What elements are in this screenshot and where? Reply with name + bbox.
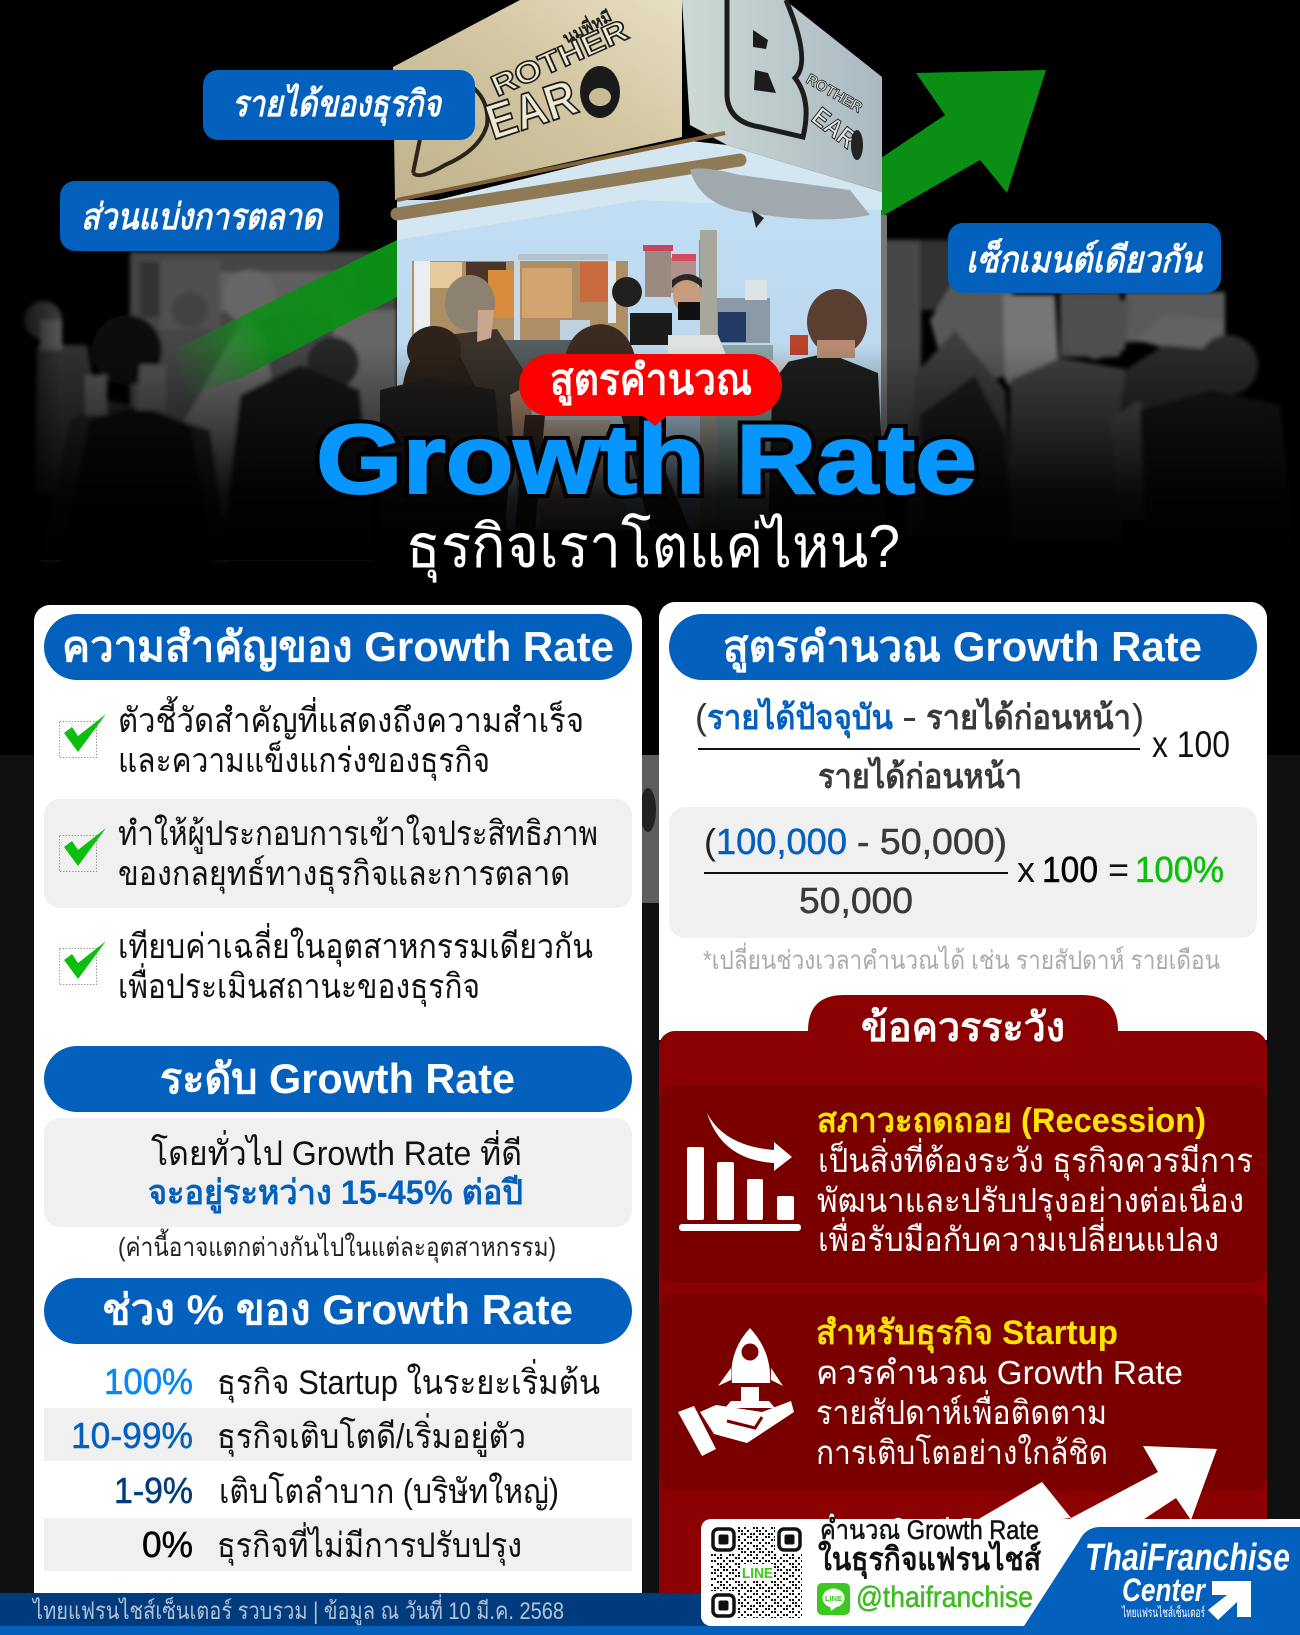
formula: example: 100,000 [716, 821, 847, 862]
heading: ranges [44, 1278, 632, 1344]
card: startup: สำหรับธุรกิจ Startup [816, 1314, 1118, 1354]
signage text: นมพี่หมี [558, 5, 615, 48]
hidden duplicate heading behind CTA: คำนวณ Growth Rate [822, 1512, 1002, 1543]
range row: 1-9% [114, 1470, 559, 1511]
range row: 0% [44, 1518, 632, 1571]
canisters and pillar [645, 247, 671, 297]
footer credit bar: ไทยแฟรนไชส์เซ็นเตอร์ รวบรวม | ข้อมูล ณ วันที่ 10 มี.ค. 2568 [31, 1594, 564, 1626]
signage text [413, 0, 865, 175]
range row: 10-99% [44, 1408, 632, 1461]
level text box [44, 1118, 632, 1227]
formula: general: รายได้ปัจจุบัน [707, 697, 893, 739]
CTA card: ในธุรกิจแฟรนไชส์ [818, 1540, 1041, 1580]
formula: general: รายได้ก่อนหน้า [926, 697, 1131, 737]
title: Growth Rate: Growth Rate [316, 404, 977, 514]
card: recession: เป็นสิ่งที่ต้องระวัง ธุรกิจควรมีการ [818, 1138, 1253, 1181]
signage text: ROTHER [803, 71, 865, 117]
signage text: EAR [479, 69, 584, 150]
range row: 0%: ธุรกิจที่ไม่มีการปรับปรุง [217, 1522, 522, 1566]
heading: importance [44, 614, 632, 680]
item 1: และความแข็งแกร่งของธุรกิจ [118, 740, 490, 781]
card: recession: สภาวะถดถอย (Recession) [817, 1102, 1206, 1140]
logo: ThaiFranchise Center: Center [1122, 1572, 1206, 1608]
range row: 1-9%: 1-9% [114, 1470, 193, 1511]
icon: LINE: LINE [825, 1596, 842, 1603]
formula note: *เปลี่ยนช่วงเวลาคำนวณได้ เช่น รายสัปดาห์ รายเดือน [703, 942, 1220, 975]
left sign [393, 0, 682, 200]
card: startup: การเติบโตอย่างใกล้ชิด [816, 1434, 1108, 1471]
formula: example: = [1108, 849, 1129, 890]
card: startup: รายสัปดาห์เพื่อติดตาม [816, 1390, 1107, 1431]
item 1 [60, 696, 584, 781]
formula: example: - 50,000) [857, 821, 1007, 862]
card: recession: เพื่อรับมือกับความเปลี่ยนแปลง [818, 1217, 1219, 1258]
card: startup [659, 1293, 1267, 1491]
range row: 100%: 100% [104, 1361, 193, 1402]
formula: example: ( [704, 821, 716, 862]
level text box: จะอยู่ระหว่าง 15-45% ต่อปี [148, 1174, 523, 1214]
formula: general: ( [695, 696, 707, 737]
bottom band [0, 1626, 1300, 1635]
tag: same segment: เซ็กเมนต์เดียวกัน [966, 238, 1203, 280]
heading: level [44, 1046, 632, 1112]
pipes and duct [397, 133, 725, 200]
QR code: LINE [742, 1565, 773, 1582]
stall structure [380, 0, 887, 530]
item 1: ตัวชี้วัดสำคัญที่แสดงถึงความสำเร็จ [118, 696, 584, 740]
tag: same segment [948, 223, 1221, 293]
logo: ThaiFranchise Center: ไทยแฟรนไชส์เซ็นเตอร์ [1121, 1603, 1205, 1620]
right sign [682, 0, 882, 192]
logo: ThaiFranchise Center [1024, 1527, 1300, 1626]
signage text: ROTHER [486, 14, 634, 103]
title: Growth Rate: Growth Rate [316, 404, 977, 514]
panel: warnings [659, 995, 1267, 1593]
formula: example: 50,000 [799, 880, 913, 921]
subtitle: ธุรกิจเราโตแค่ไหน? [406, 512, 900, 583]
item 3: เพื่อประเมินสถานะของธุรกิจ [118, 963, 480, 1007]
heading: importance: ความสำคัญของ Growth Rate [62, 623, 614, 672]
formula: example: 100% [1135, 849, 1224, 890]
icon: rocket on hand [678, 1328, 794, 1456]
formula: general: x 100 [1152, 724, 1230, 765]
panel: left white [34, 605, 642, 1593]
CTA card [701, 1515, 1300, 1626]
red label: สูตรคำนวณ [550, 356, 752, 406]
card: recession: พัฒนาและปรับปรุงอย่างต่อเนื่อง [817, 1178, 1244, 1221]
item 3: เทียบค่าเฉลี่ยในอุตสาหกรรมเดียวกัน [118, 923, 593, 967]
window and posters [412, 261, 628, 341]
CTA card: @thaifranchise [856, 1581, 1033, 1614]
warnings heading: ข้อควรระวัง [861, 1006, 1065, 1050]
crowd right, greyscale [881, 240, 1295, 555]
heading: formula: สูตรคำนวณ Growth Rate [723, 623, 1202, 673]
CTA text: คำนวณ Growth Rate [820, 1515, 1039, 1545]
level text box: โดยทั่วไป Growth Rate ที่ดี [151, 1130, 522, 1173]
range row: 100%: ธุรกิจ Startup ในระยะเริ่มต้น [217, 1359, 600, 1403]
icon: declining bars [679, 1113, 801, 1231]
hero photo: crowd and stall [0, 0, 1300, 560]
range row: 100% [104, 1359, 600, 1403]
tag: market share: ส่วนแบ่งการตลาด [81, 196, 324, 237]
QR code [709, 1525, 804, 1620]
tag: revenue: รายได้ของธุรกิจ [232, 83, 443, 126]
item 2 [44, 799, 632, 908]
item 3 [60, 923, 593, 1007]
card: recession [659, 1085, 1267, 1283]
level note: (ค่านี้อาจแตกต่างกันไปในแต่ละอุตสาหกรรม) [118, 1228, 556, 1263]
green growth arrow [173, 70, 1046, 395]
fade to black [0, 345, 1300, 560]
formula: example: 100 [1042, 849, 1098, 890]
red label [519, 354, 782, 426]
range row: 1-9%: เติบโตลำบาก (บริษัทใหญ่) [219, 1472, 559, 1511]
tag: revenue [203, 70, 475, 140]
range row: 10-99%: ธุรกิจเติบโตดี/เริ่มอยู่ตัว [217, 1413, 526, 1457]
item 2: ทำให้ผู้ประกอบการเข้าใจประสิทธิภาพ [118, 814, 598, 854]
icon: LINE [817, 1583, 850, 1615]
formula: general: ) [1132, 696, 1144, 737]
heading: ranges: ช่วง % ของ Growth Rate [102, 1286, 573, 1333]
people inside [380, 274, 886, 530]
formula: example [669, 807, 1257, 938]
white arrow [960, 1446, 1217, 1530]
heading: formula [669, 614, 1257, 680]
range row: 0%: 0% [142, 1524, 193, 1565]
range row: 10-99%: 10-99% [71, 1415, 193, 1456]
panel: right white [659, 602, 1267, 1040]
item 2: ของกลยุทธ์ทางธุรกิจและการตลาด [118, 855, 570, 894]
crowd left, greyscale [24, 252, 397, 560]
photo strip between panels [640, 755, 660, 903]
tag: market share [60, 181, 339, 251]
heading: level: ระดับ Growth Rate [160, 1055, 515, 1102]
formula: general [695, 696, 1230, 796]
signage text: EAR [806, 101, 863, 154]
formula: example: x [1017, 849, 1035, 890]
card: startup: ควรคำนวณ Growth Rate [816, 1354, 1183, 1391]
formula: general: รายได้ก่อนหน้า [818, 756, 1022, 796]
